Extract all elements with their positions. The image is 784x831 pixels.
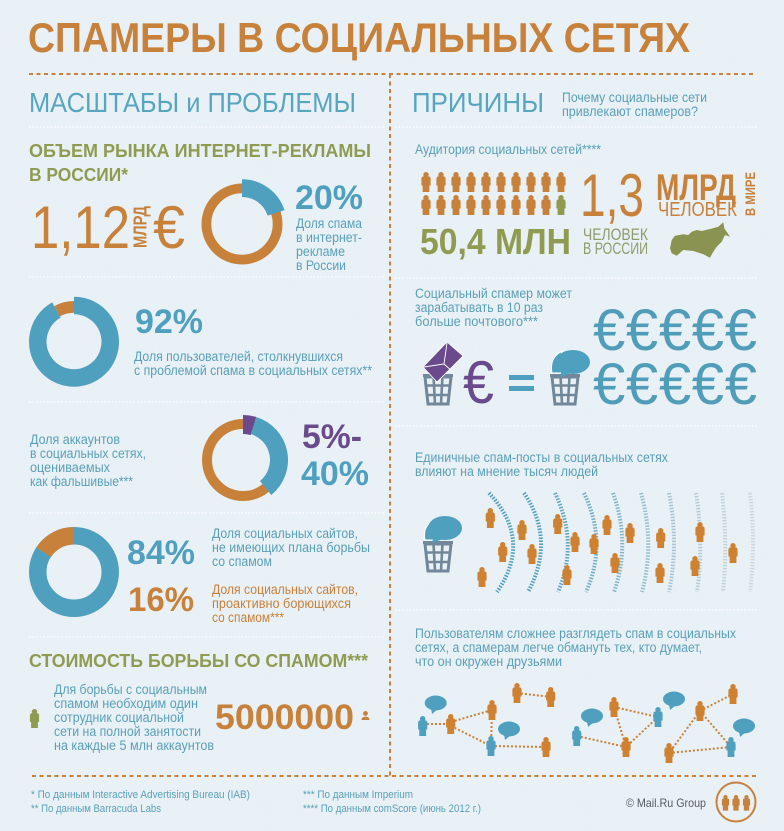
donut: 84 and 16 percent (38, 536, 110, 608)
caption: friends: сетях, а спамерам легче обмануть тех, кто думает, (415, 640, 702, 655)
caption: no plan: со спамом (212, 554, 272, 569)
caption: proactive (212, 582, 358, 625)
caption: influence (415, 450, 668, 479)
equals sign (509, 378, 534, 388)
caption: one employee: сети на полной занятости (54, 724, 201, 739)
subheading: ad market: ОБЪЕМ РЫНКА ИНТЕРНЕТ-РЕКЛАМЫ (29, 141, 371, 161)
caption: friends: что он окружен друзьями (415, 654, 562, 669)
caption: influence: влияют на мнение тысяч людей (415, 464, 598, 479)
caption: fake accounts: Доля аккаунтов (30, 432, 120, 447)
stat: billion: МЛРД (656, 167, 736, 208)
title: СПАМЕРЫ В СОЦИАЛЬНЫХ СЕТЯХ (28, 14, 690, 61)
unit: billion: МЛРД (130, 206, 150, 248)
network people: orange (446, 683, 738, 763)
icon: bin with envelope (423, 342, 463, 404)
icon: purple euro: € (463, 349, 494, 416)
panel: earnings comparison (415, 286, 757, 417)
donut: 5 to 40 percent (207, 424, 279, 496)
subheading: why networks attract spammers: Почему социальные сети (562, 90, 707, 105)
panel: influence (415, 450, 753, 592)
panel: fake accounts (30, 418, 369, 496)
subheading: in Russia: В РОССИИ* (29, 165, 128, 185)
caption: one employee: на каждые 5 млн аккаунтов (54, 738, 214, 753)
subheading: why networks attract spammers (562, 90, 707, 119)
stat: 50.4 million: 50,4 МЛН (420, 221, 571, 262)
caption: spam share: в России (296, 258, 346, 273)
caption: users facing spam: с проблемой спама в социальных сетях** (134, 363, 373, 378)
caption: friends (415, 626, 736, 669)
caption: earnings: зарабатывать в 10 раз (415, 300, 543, 315)
caption: one employee: спамом необходим один (54, 696, 198, 711)
speech bubbles (425, 692, 755, 740)
label: people in Russia: ЧЕЛОВЕК (583, 225, 648, 244)
caption: fake accounts: как фальшивые*** (30, 474, 134, 489)
heading: scale and problems: МАСШТАБЫ и ПРОБЛЕМЫ (29, 87, 356, 118)
footnotes: *** По данным Imperium (303, 789, 413, 801)
market value: 1,12 (31, 194, 130, 261)
copyright: © Mail.Ru Group (626, 796, 706, 810)
panel: audience (415, 142, 758, 262)
footnotes: * По данным Interactive Advertising Bureau (IAB) (31, 789, 250, 801)
label: worldwide: В МИРЕ (742, 172, 758, 216)
caption: spam share: Доля спама (296, 216, 362, 231)
caption: proactive: проактивно борющихся (212, 596, 351, 611)
caption: earnings: Социальный спамер может (415, 286, 572, 301)
icon: bin with speech bubble (423, 516, 462, 571)
caption: audience: Аудитория социальных сетей**** (415, 142, 602, 157)
signal waves (489, 493, 753, 592)
footnotes (31, 789, 481, 815)
caption: users facing spam (134, 349, 373, 378)
stat: 92 percent: 92% (135, 303, 203, 341)
stat: 1.3: 1,3 (580, 162, 644, 229)
subheading: why networks attract spammers: привлекают спамеров? (562, 104, 698, 119)
donut: 20 percent (206, 188, 278, 260)
stat: 84 percent: 84% (127, 534, 195, 572)
caption: fake accounts (30, 432, 146, 489)
panel: friends network (415, 626, 755, 763)
euro sign: € (153, 194, 185, 261)
panel: cost of fighting spam (29, 651, 370, 753)
caption: one employee: сотрудник социальной (54, 710, 184, 725)
panel: 92 percent (38, 303, 373, 378)
caption: one employee: Для борьбы с социальным (54, 682, 207, 697)
caption: proactive: со спамом*** (212, 610, 285, 625)
label: people: ЧЕЛОВЕК (658, 199, 737, 221)
caption: spam share (296, 216, 362, 273)
icon row: people (421, 172, 566, 215)
stat: 20 percent: 20% (295, 179, 363, 217)
stat: 5 percent: 5%- (302, 418, 362, 456)
footnotes: ** По данным Barracuda Labs (31, 803, 161, 815)
network people: blue (418, 707, 736, 757)
caption: earnings: больше почтового*** (415, 314, 539, 329)
heading: causes: ПРИЧИНЫ (412, 87, 544, 118)
caption: spam share: рекламе (296, 244, 345, 259)
caption: friends: Пользователям сложнее разглядеть спам в социальных (415, 626, 736, 641)
caption: proactive: Доля социальных сайтов, (212, 582, 358, 597)
euro row 1: €€€€€ (593, 298, 757, 363)
euro row 2: €€€€€ (593, 352, 757, 417)
network links (423, 693, 733, 753)
footnotes: **** По данным comScore (июнь 2012 г.) (303, 803, 481, 815)
caption: no plan: не имеющих плана борьбы (212, 540, 370, 555)
panel: ad market (29, 141, 371, 273)
stat: 16 percent: 16% (128, 581, 194, 619)
icon: small person (362, 711, 370, 720)
caption: no plan (212, 526, 370, 569)
icon: bin with speech bubble (550, 350, 590, 404)
caption: no plan: Доля социальных сайтов, (212, 526, 358, 541)
donut: 92 percent (38, 305, 110, 378)
caption: earnings (415, 286, 572, 329)
caption: one employee (54, 682, 214, 753)
caption: spam share: в интернет- (296, 230, 362, 245)
stat: 40 percent: 40% (301, 455, 369, 493)
icon: employee (30, 709, 39, 728)
icon: map of Russia (670, 222, 730, 258)
caption: users facing spam: Доля пользователей, столкнувшихся (134, 349, 343, 364)
caption: fake accounts: оцениваемых (30, 460, 110, 475)
logo: Mail.Ru Group (716, 782, 756, 822)
audience people (477, 508, 738, 587)
label: people in Russia (583, 225, 648, 258)
stat: 5000000: 5000000 (215, 698, 354, 737)
panel: anti-spam plans (38, 526, 370, 625)
subheading: cost: СТОИМОСТЬ БОРЬБЫ СО СПАМОМ*** (29, 651, 368, 671)
caption: influence: Единичные спам-посты в социальных сетях (415, 450, 668, 465)
label: people in Russia: В РОССИИ (583, 239, 648, 258)
caption: fake accounts: в социальных сетях, (30, 446, 146, 461)
